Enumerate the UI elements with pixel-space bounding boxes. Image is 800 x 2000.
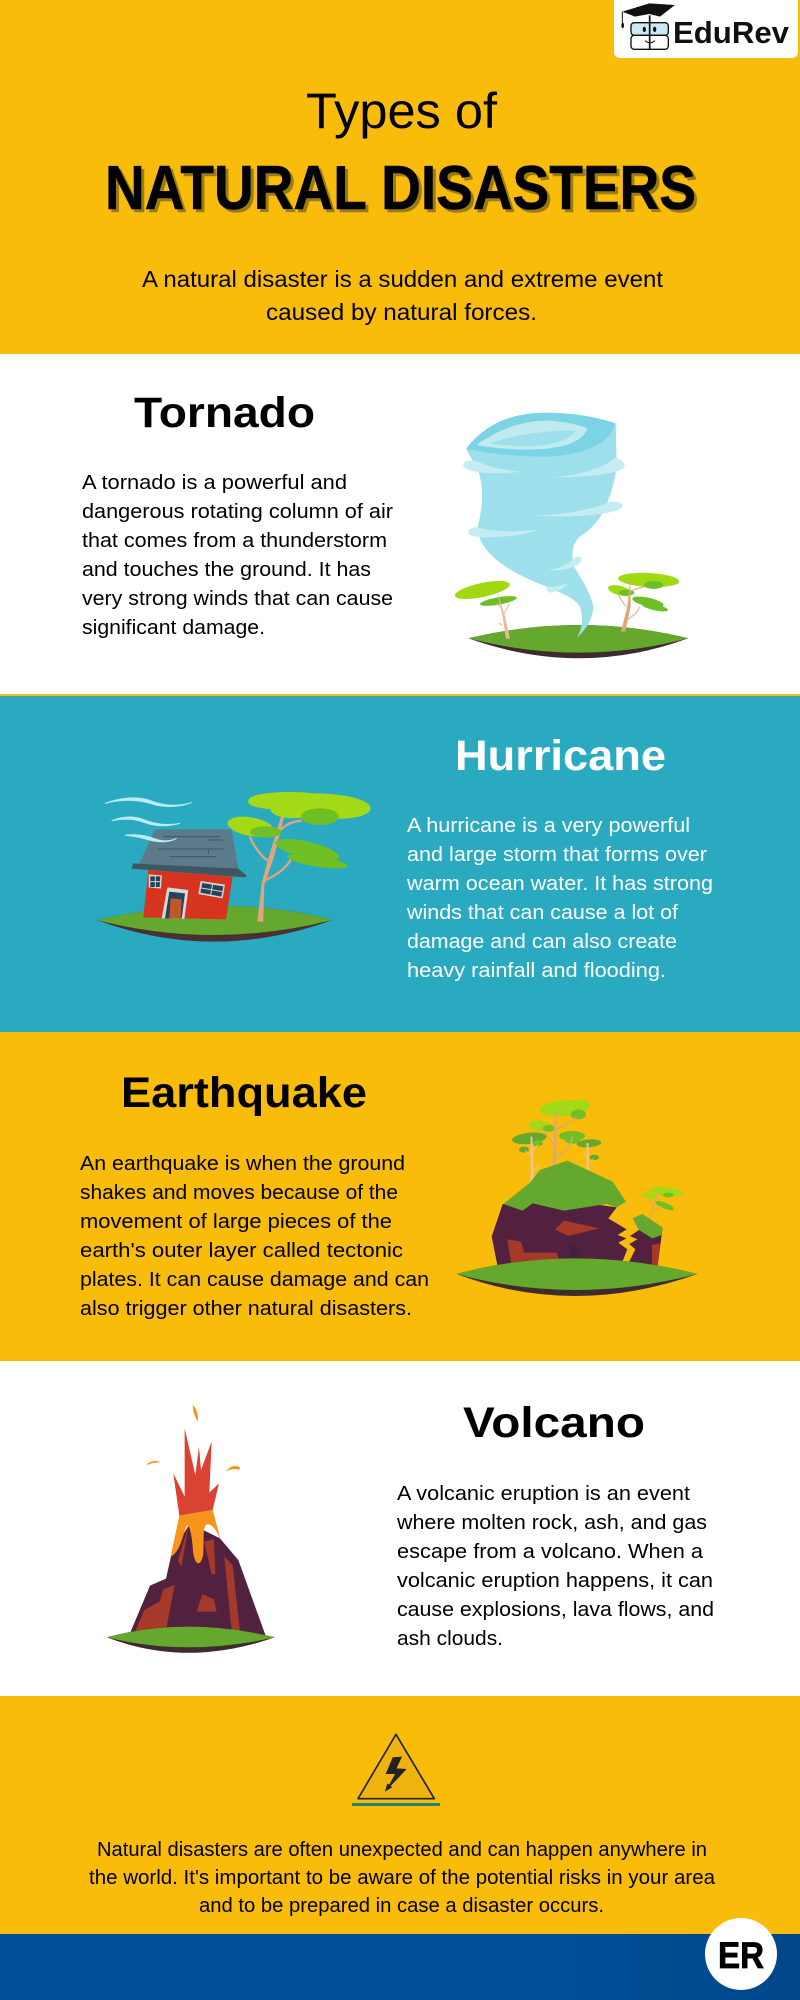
rock — [130, 1523, 266, 1637]
heading: Earthquake: Earthquake — [121, 1069, 367, 1117]
text: hurricane description — [406, 815, 713, 982]
text: tornado description: dangerous rotating column of air — [82, 501, 393, 523]
panel: closing note — [0, 1696, 800, 1934]
text: tornado description — [82, 472, 393, 639]
title line: Types of: Types of — [306, 83, 497, 139]
text: hurricane description: heavy rainfall and flooding. — [407, 960, 666, 982]
ground — [97, 906, 332, 942]
intro text — [142, 266, 664, 325]
lava — [171, 1510, 221, 1563]
text: tornado description: that comes from a thunderstorm — [82, 530, 387, 552]
ground — [457, 1258, 697, 1296]
text: earthquake description: plates. It can cause damage and can — [80, 1269, 429, 1291]
text: earthquake description — [80, 1153, 429, 1320]
footer bar — [0, 1934, 800, 2000]
text: volcano description: cause explosions, lava flows, and — [397, 1599, 714, 1621]
flames — [173, 1428, 219, 1516]
text: closing note: the world. It's important to be aware of the potential risks in your area — [89, 1867, 716, 1889]
text: closing note: Natural disasters are often unexpected and can happen anywhere in — [97, 1839, 707, 1861]
ground — [468, 625, 688, 658]
logo: EduRev — [614, 0, 798, 58]
text: tornado description: very strong winds that can cause — [82, 588, 393, 610]
logo: EduRev: EduRev — [673, 15, 790, 50]
trees — [539, 1099, 589, 1118]
text: hurricane description: winds that can cause a lot of — [406, 902, 678, 924]
wind lines — [105, 798, 192, 842]
heading: Hurricane: Hurricane — [455, 732, 666, 780]
illustration: house in hurricane — [97, 792, 371, 942]
text: volcano description: A volcanic eruption is an event — [397, 1483, 690, 1505]
panel: tornado — [0, 354, 800, 696]
lava drops — [146, 1405, 240, 1472]
panel: header — [0, 0, 800, 354]
house — [143, 870, 233, 919]
panel: volcano — [0, 1361, 800, 1696]
text: hurricane description: A hurricane is a very powerful — [407, 815, 690, 837]
text: hurricane description: warm ocean water. It has strong — [406, 873, 713, 895]
heading: Tornado: Tornado — [134, 389, 315, 437]
text: tornado description: A tornado is a powerful and — [82, 472, 347, 494]
tree left — [453, 577, 511, 603]
panel: hurricane — [0, 696, 800, 1032]
text: volcano description: volcanic eruption happens, it can — [397, 1570, 713, 1592]
text: earthquake description: movement of large pieces of the — [80, 1211, 392, 1233]
panel: earthquake — [0, 1032, 800, 1361]
title line: Natural Disasters: NATURAL DISASTERS — [105, 154, 696, 223]
tree — [257, 817, 284, 922]
intro text: A natural disaster is a sudden and extreme event — [142, 266, 664, 292]
text: earthquake description: An earthquake is when the ground — [80, 1153, 405, 1175]
text: volcano description: escape from a volcano. When a — [397, 1541, 704, 1563]
text: hurricane description: and large storm that forms over — [407, 844, 707, 866]
rock — [492, 1200, 627, 1270]
badge: ER: ER — [718, 1935, 764, 1976]
text: volcano description: where molten rock, ash, and gas — [396, 1512, 707, 1534]
tree right — [618, 571, 680, 589]
text: tornado description: and touches the ground. It has — [82, 559, 371, 581]
text: earthquake description: earth's outer layer called tectonic — [80, 1240, 403, 1262]
text: hurricane description: damage and can also create — [407, 931, 677, 953]
text: earthquake description: shakes and moves because of the — [80, 1182, 398, 1204]
text: earthquake description: also trigger other natural disasters. — [80, 1298, 412, 1320]
text: volcano description: ash clouds. — [397, 1628, 503, 1650]
illustration: earthquake — [457, 1099, 697, 1296]
text: closing note — [89, 1839, 716, 1917]
intro text: caused by natural forces. — [266, 299, 537, 325]
heading: Volcano: Volcano — [463, 1399, 645, 1447]
icon: high voltage warning triangle — [352, 1734, 440, 1806]
badge: ER — [705, 1918, 777, 1990]
text: volcano description — [396, 1483, 714, 1650]
small tree on fragment — [648, 1186, 684, 1198]
ground — [107, 1627, 275, 1653]
funnel — [466, 423, 617, 638]
illustration: volcano — [107, 1405, 275, 1653]
text: tornado description: significant damage. — [82, 617, 265, 639]
illustration: tornado — [453, 413, 688, 658]
text: closing note: and to be prepared in case a disaster occurs. — [199, 1895, 604, 1917]
icon: graduation cap mascot — [621, 3, 675, 50]
